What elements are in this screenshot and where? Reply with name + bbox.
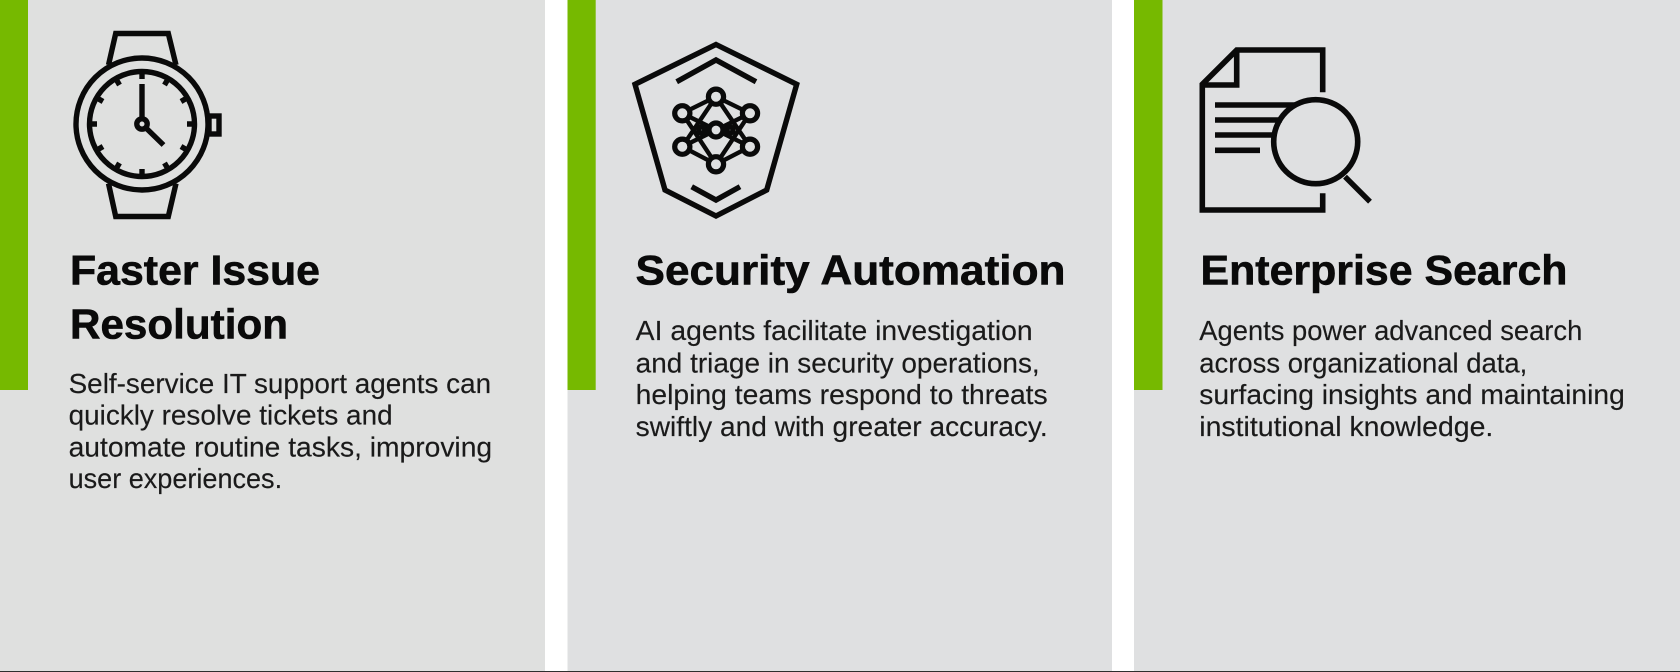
heading: Faster Issue Resolution — [70, 246, 320, 348]
text block: Faster Issue Resolution description — [69, 368, 492, 494]
text block: Security Automation description — [636, 315, 1048, 442]
text block: Enterprise Search description: institutional knowledge. — [1199, 411, 1493, 442]
text block: Security Automation description: AI agents facilitate investigation — [636, 315, 1033, 346]
text block: Security Automation description: helping teams respond to threats — [636, 379, 1048, 410]
green accent bar — [1134, 0, 1162, 390]
heading: Security Automation: Security Automation — [636, 246, 1066, 294]
panel: enterprise search — [1134, 0, 1680, 671]
heading: Faster Issue Resolution: Resolution — [70, 300, 288, 348]
panel: security automation — [568, 0, 1112, 671]
heading: Enterprise Search: Enterprise Search — [1200, 246, 1568, 294]
icon: wristwatch — [76, 34, 219, 216]
text block: Enterprise Search description — [1199, 315, 1625, 442]
text block: Security Automation description: and triage in security operations, — [636, 348, 1040, 378]
text block: Faster Issue Resolution description: quickly resolve tickets and — [69, 400, 393, 430]
green accent bar — [0, 0, 28, 390]
text block: Faster Issue Resolution description: user experiences. — [69, 463, 282, 494]
text block: Security Automation description: swiftly and with greater accuracy. — [636, 411, 1048, 442]
text block: Enterprise Search description: Agents power advanced search — [1199, 315, 1582, 346]
text block: Faster Issue Resolution description: Self-service IT support agents can — [69, 368, 491, 399]
icon: shield with neural network — [635, 44, 797, 216]
heading: Faster Issue Resolution: Faster Issue — [70, 246, 320, 294]
green accent bar — [568, 0, 596, 390]
text block: Faster Issue Resolution description: automate routine tasks, improving — [69, 432, 492, 462]
text block: Enterprise Search description: across organizational data, — [1199, 348, 1527, 378]
icon: document with magnifying glass — [1202, 50, 1370, 210]
panel: faster issue resolution — [0, 0, 545, 671]
text block: Enterprise Search description: surfacing insights and maintaining — [1199, 379, 1625, 410]
